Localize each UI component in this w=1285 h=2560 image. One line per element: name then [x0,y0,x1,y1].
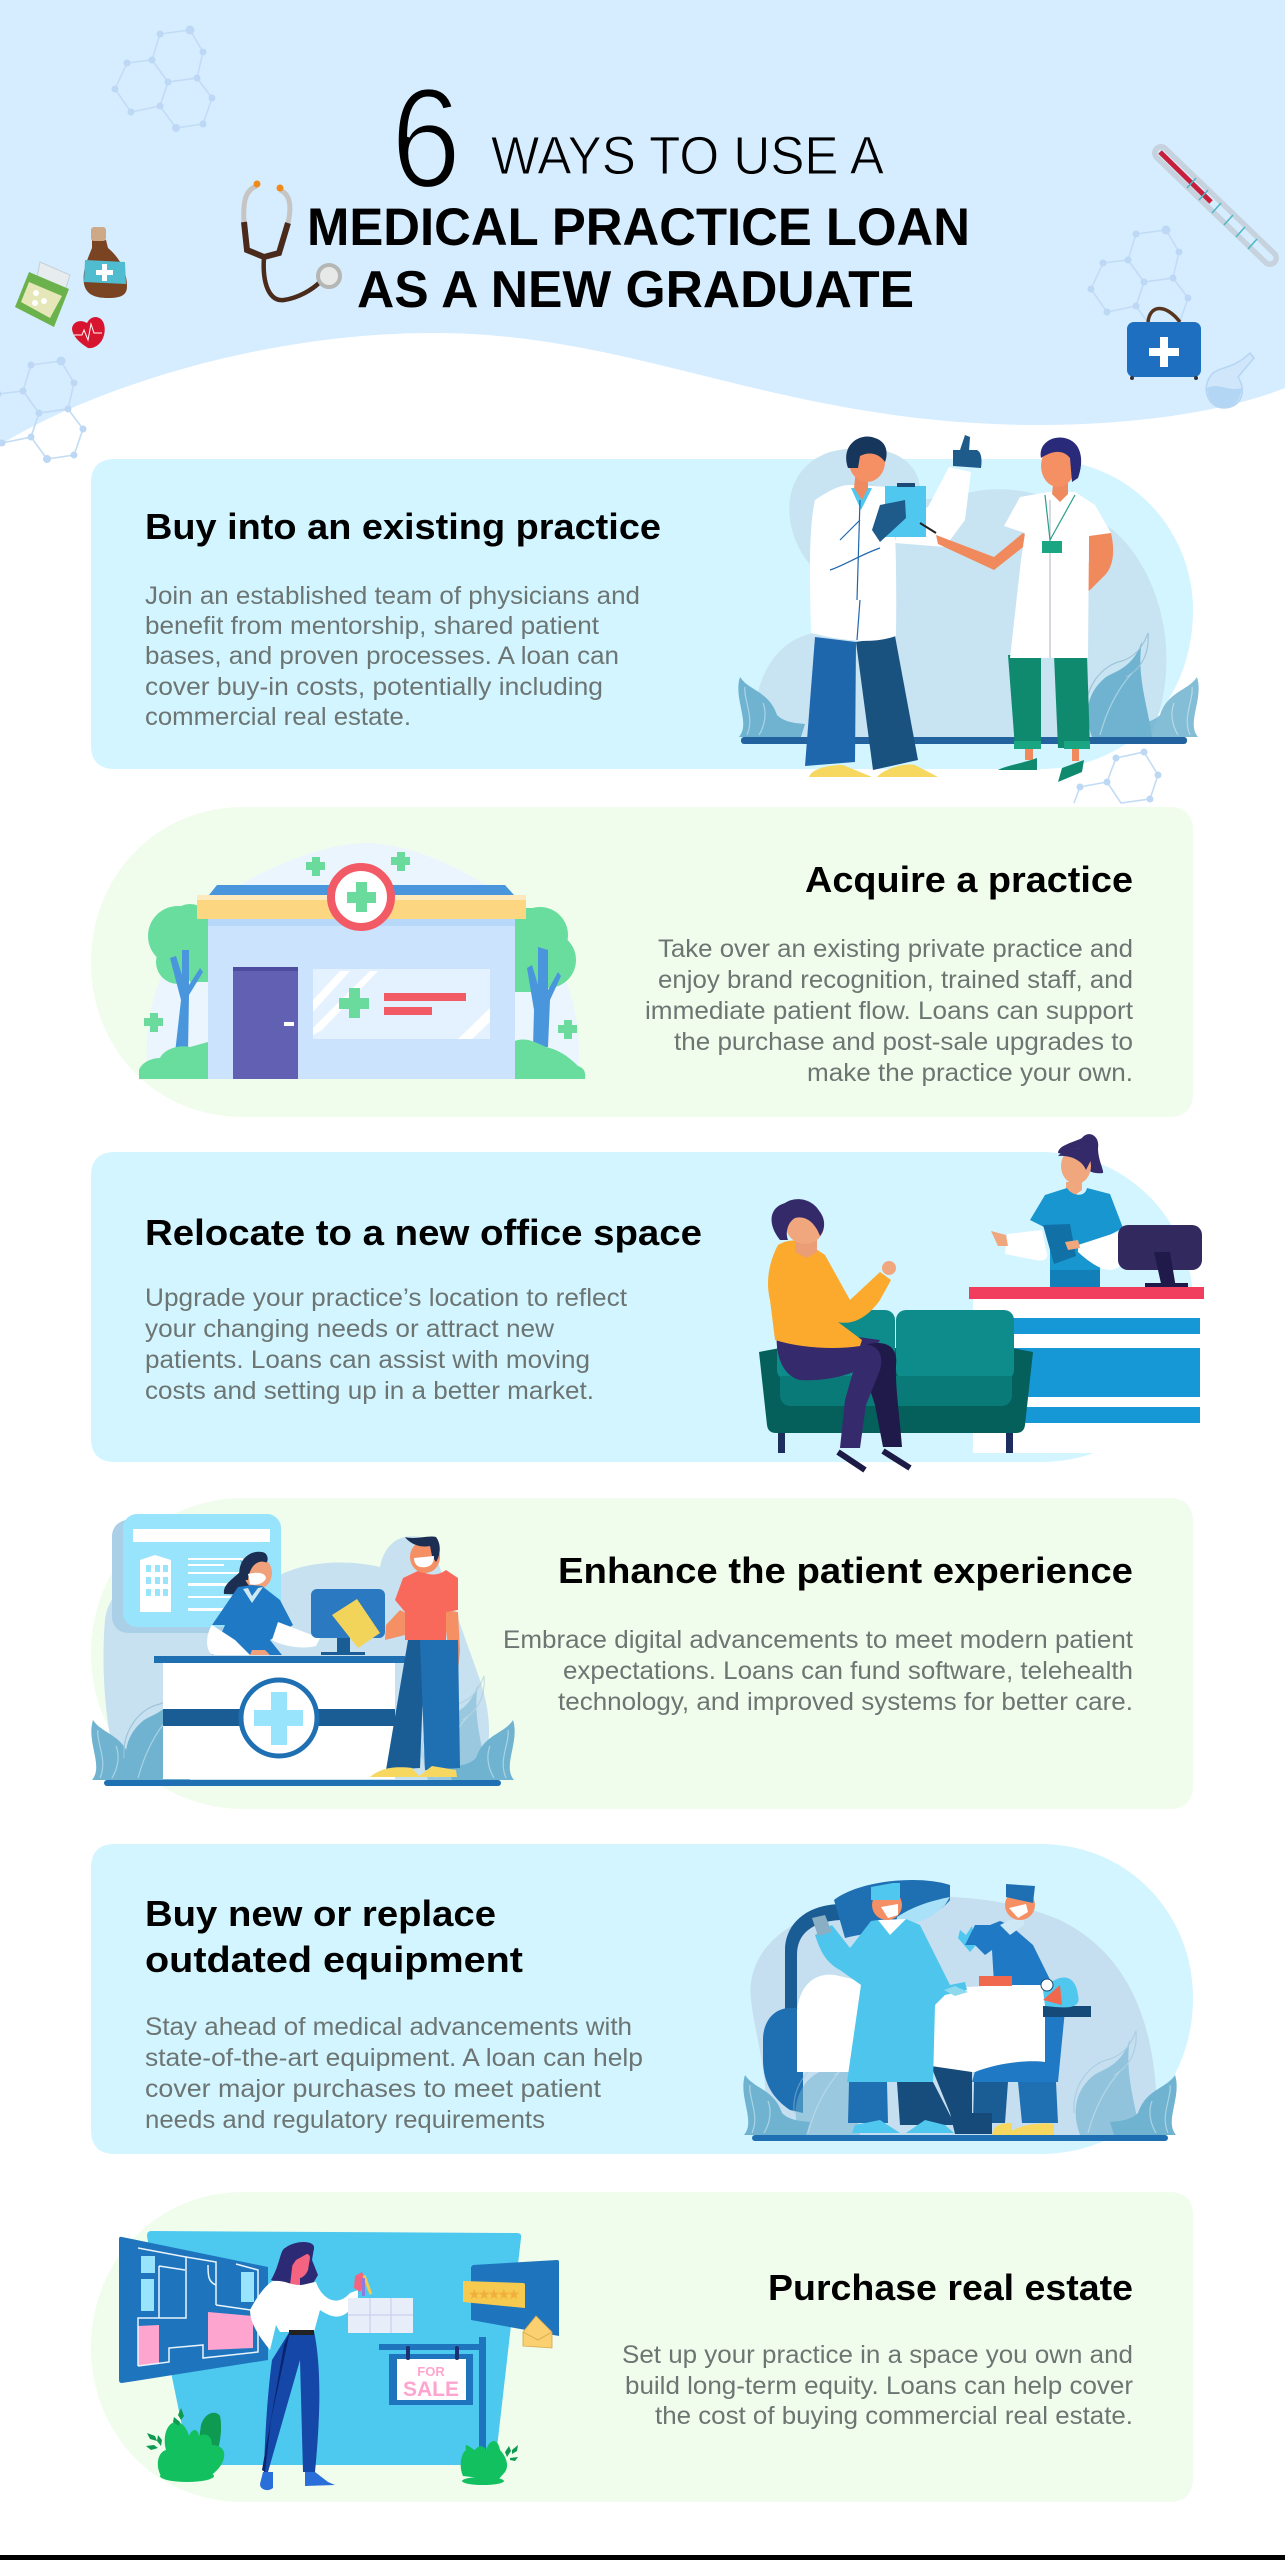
body text: Take over an existing private practice and [658,935,1133,963]
hexagon pattern top left [112,26,216,132]
body text: make the practice your own. [807,1059,1133,1087]
body text: Upgrade your practice’s location to reflect [145,1284,627,1312]
monitor [311,1589,385,1655]
body text: Join an established team of physicians and [145,582,640,610]
seated woman [768,1199,910,1470]
receptionist [991,1134,1125,1287]
hexagon pattern under first panel [1074,748,1162,803]
surgical lamp [763,1880,950,2113]
panel: enhance the patient experience [91,1498,1193,1809]
body text: cover buy-in costs, potentially including [145,673,603,701]
floor bar [752,2135,1168,2141]
body text: bases, and proven processes. A loan can [145,642,619,670]
door [233,967,298,1079]
body text [645,935,1133,1087]
title: 6 [391,59,461,218]
hexagon pattern bottom left [0,356,86,463]
heading: Purchase real estate [768,2267,1133,2308]
illustration: surgeons in operating room [743,1880,1177,2141]
body text: needs and regulatory requirements [145,2106,545,2134]
operating table drape [797,1975,1091,2134]
woman holding keys [250,2242,372,2490]
doctor left [805,435,982,777]
panel: acquire a practice [91,807,1193,1117]
heading: Buy new or replace [145,1893,496,1934]
body text [145,1284,627,1405]
envelope [332,1599,380,1648]
illustration: two doctors [738,435,1199,782]
sofa [759,1310,1033,1453]
panel: purchase real estate [91,2192,1193,2502]
illustration: reception and waiting room [759,1134,1204,1470]
surgeon right [958,1884,1065,2135]
panel: buy new or replace outdated equipment [91,1844,1193,2154]
body text: technology, and improved systems for better care. [558,1688,1133,1716]
title: MEDICAL PRACTICE LOAN [307,198,970,257]
monitor [1118,1225,1202,1288]
icon: stethoscope [244,180,340,300]
illustration: real estate purchase [119,2231,559,2490]
body text: state-of-the-art equipment. A loan can help [145,2044,643,2072]
review card: ★★★★★ [468,2286,520,2302]
reception desk [969,1287,1204,1453]
heading: Enhance the patient experience [558,1550,1133,1591]
floor plan [119,2237,268,2383]
for sale sign: SALE [403,2378,459,2401]
title: WAYS TO USE A [491,126,884,186]
heading: Acquire a practice [805,859,1133,900]
wall screen [112,1514,281,1633]
for sale sign [379,2337,486,2450]
for sale sign: FOR [417,2364,445,2379]
heading [145,1893,523,1980]
window [313,969,490,1039]
nurse [207,1552,320,1655]
body text: cover major purchases to meet patient [145,2075,601,2103]
body text: expectations. Loans can fund software, telehealth [563,1657,1133,1685]
body text: patients. Loans can assist with moving [145,1346,590,1374]
illustration: clinic building [139,843,585,1079]
body text: immediate patient flow. Loans can support [645,997,1133,1025]
bush left [146,2408,224,2482]
heading: outdated equipment [145,1939,523,1980]
body text [145,2013,643,2134]
illustration: masked patient at desk [91,1514,515,1786]
body text: Embrace digital advancements to meet modern patient [503,1626,1133,1654]
icon: medical bag [1127,308,1201,380]
bush right [461,2441,518,2485]
panel: relocate to a new office space [91,1134,1204,1470]
icon: pill box [15,262,70,327]
body text [503,1626,1133,1716]
header background wave [0,0,1285,445]
footer bar [0,2555,1285,2560]
body text: Set up your practice in a space you own and [622,2341,1133,2369]
envelope [523,2316,552,2348]
body text: your changing needs or attract new [145,1315,555,1343]
icon: flask [1206,353,1254,408]
icon: heart [72,317,105,348]
doctor right [936,438,1113,782]
body text: enjoy brand recognition, trained staff, and [658,966,1133,994]
patient man [370,1537,460,1777]
heading: Buy into an existing practice [145,506,661,547]
heading: Relocate to a new office space [145,1212,702,1253]
icon: medicine bottle [84,227,127,298]
review card [463,2260,559,2336]
body text: build long-term equity. Loans can help cover [625,2372,1133,2400]
surgeon left [812,1883,968,2133]
title: AS A NEW GRADUATE [357,261,914,319]
body text [145,582,640,731]
icon: thermometer [1160,152,1270,258]
body text: costs and setting up in a better market. [145,1377,594,1405]
body text: the cost of buying commercial real estate. [655,2402,1133,2430]
body text [622,2341,1133,2430]
sign: cross circle [331,867,391,927]
body text: Stay ahead of medical advancements with [145,2013,632,2041]
body text: commercial real estate. [145,703,411,731]
body text: benefit from mentorship, shared patient [145,612,599,640]
body text: the purchase and post-sale upgrades to [674,1028,1133,1056]
reception desk [104,1656,501,1786]
floating crosses [144,852,577,1039]
keys grid card [348,2298,413,2333]
hexagon pattern right [1088,226,1192,332]
panel: buy into an existing practice [91,435,1199,782]
title [307,59,970,319]
